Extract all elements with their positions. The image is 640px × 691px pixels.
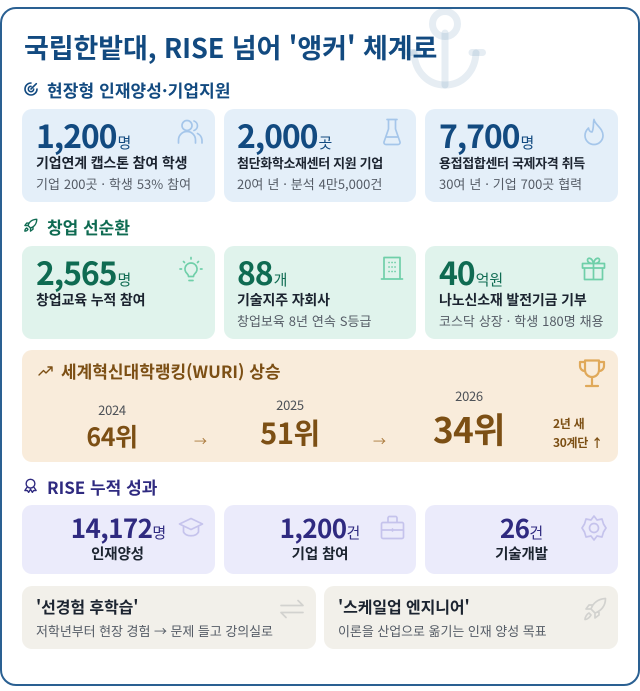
panel: nano fund card <box>425 246 618 339</box>
heading: 세계혁신대학랭킹(WURI) 상승 <box>61 358 280 383</box>
stat: 14,172명 <box>71 509 166 546</box>
panel: capstone card <box>22 109 215 202</box>
icon: users <box>178 120 203 144</box>
stat: 1,200건 <box>280 509 360 546</box>
stat: 2,000곳 <box>237 112 332 158</box>
description: 이론을 산업으로 옮기는 인재 양성 목표 <box>338 621 547 640</box>
panel: welding center card <box>425 109 618 202</box>
heading: '선경험 후학습' <box>36 594 138 618</box>
year 2026: 2026 <box>455 386 483 405</box>
panel: experience first <box>22 586 316 649</box>
year 2024: 64위 <box>86 418 138 454</box>
icon: graduation cap <box>178 518 204 536</box>
label: 첨단화학소재센터 지원 기업 <box>237 153 383 172</box>
panel: companies result <box>224 505 416 574</box>
label: 나노신소재 발전기금 기부 <box>439 290 587 310</box>
section heading: RISE results: RISE 누적 성과 <box>47 474 157 499</box>
label: 용접접합센터 국제자격 취득 <box>439 153 585 172</box>
label: 창업교육 누적 참여 <box>36 290 145 310</box>
section heading: startup: 창업 선순환 <box>47 214 130 239</box>
icon: rocket <box>584 598 606 620</box>
year 2026: 34위 <box>433 403 505 454</box>
detail: 30여 년 · 기업 700곳 협력 <box>439 174 582 193</box>
icon: light bulb <box>179 256 203 282</box>
label: 기업 참여 <box>292 543 348 564</box>
year 2025: 2025 <box>276 395 304 414</box>
stat: 2,565명 <box>36 249 131 295</box>
label: 인재양성 <box>91 543 144 564</box>
icon: award <box>24 478 37 493</box>
detail: 20여 년 · 분석 4만5,000건 <box>237 174 382 193</box>
detail: 기업 200곳 · 학생 53% 참여 <box>36 174 191 193</box>
title: 국립한밭대, RISE 넘어 '앵커' 체계로 <box>24 27 437 66</box>
stat: 1,200명 <box>36 112 131 158</box>
icon: flask <box>383 118 401 146</box>
panel: startup education card <box>22 246 215 339</box>
year 2024 <box>86 400 138 454</box>
icon: gear <box>581 515 607 541</box>
callout <box>553 415 603 451</box>
label: 기술지주 자회사 <box>237 290 330 310</box>
panel: scale-up engineer <box>324 586 618 649</box>
icon: gift <box>582 257 606 280</box>
arrow: → <box>373 431 386 450</box>
icon: swap arrows <box>280 600 304 618</box>
year 2024: 2024 <box>98 400 126 419</box>
heading: '스케일업 엔지니어' <box>338 594 470 618</box>
detail: 창업보육 8년 연속 S등급 <box>237 311 371 330</box>
icon: flame <box>584 118 604 146</box>
panel: technology result <box>425 505 618 574</box>
stat: 88개 <box>237 249 287 295</box>
icon: trophy <box>578 359 606 388</box>
icon: target <box>24 82 38 96</box>
detail: 코스닥 상장 · 학생 180명 채용 <box>439 311 604 330</box>
icon: briefcase <box>380 516 404 540</box>
panel: chemical center card <box>224 109 416 202</box>
stat: 7,700명 <box>439 112 534 158</box>
label: 기업연계 캡스톤 참여 학생 <box>36 153 187 173</box>
panel: talent result <box>22 505 215 574</box>
section heading: field talent: 현장형 인재양성·기업지원 <box>47 77 231 102</box>
icon: building <box>380 256 404 280</box>
stat: 40억원 <box>439 249 503 295</box>
icon: trending up <box>38 366 53 376</box>
year 2025: 51위 <box>260 411 320 453</box>
panel: tech holding card <box>224 246 416 339</box>
callout: 2년 새 <box>553 415 584 432</box>
description: 저학년부터 현장 경험 → 문제 들고 강의실로 <box>36 621 273 640</box>
label: 기술개발 <box>495 543 548 564</box>
icon: rocket <box>24 218 38 232</box>
stat: 26건 <box>500 509 543 546</box>
arrow: → <box>194 431 207 450</box>
panel: WURI ranking <box>22 350 618 462</box>
icon: anchor watermark <box>405 9 486 88</box>
callout: 30계단 ↑ <box>553 434 603 451</box>
